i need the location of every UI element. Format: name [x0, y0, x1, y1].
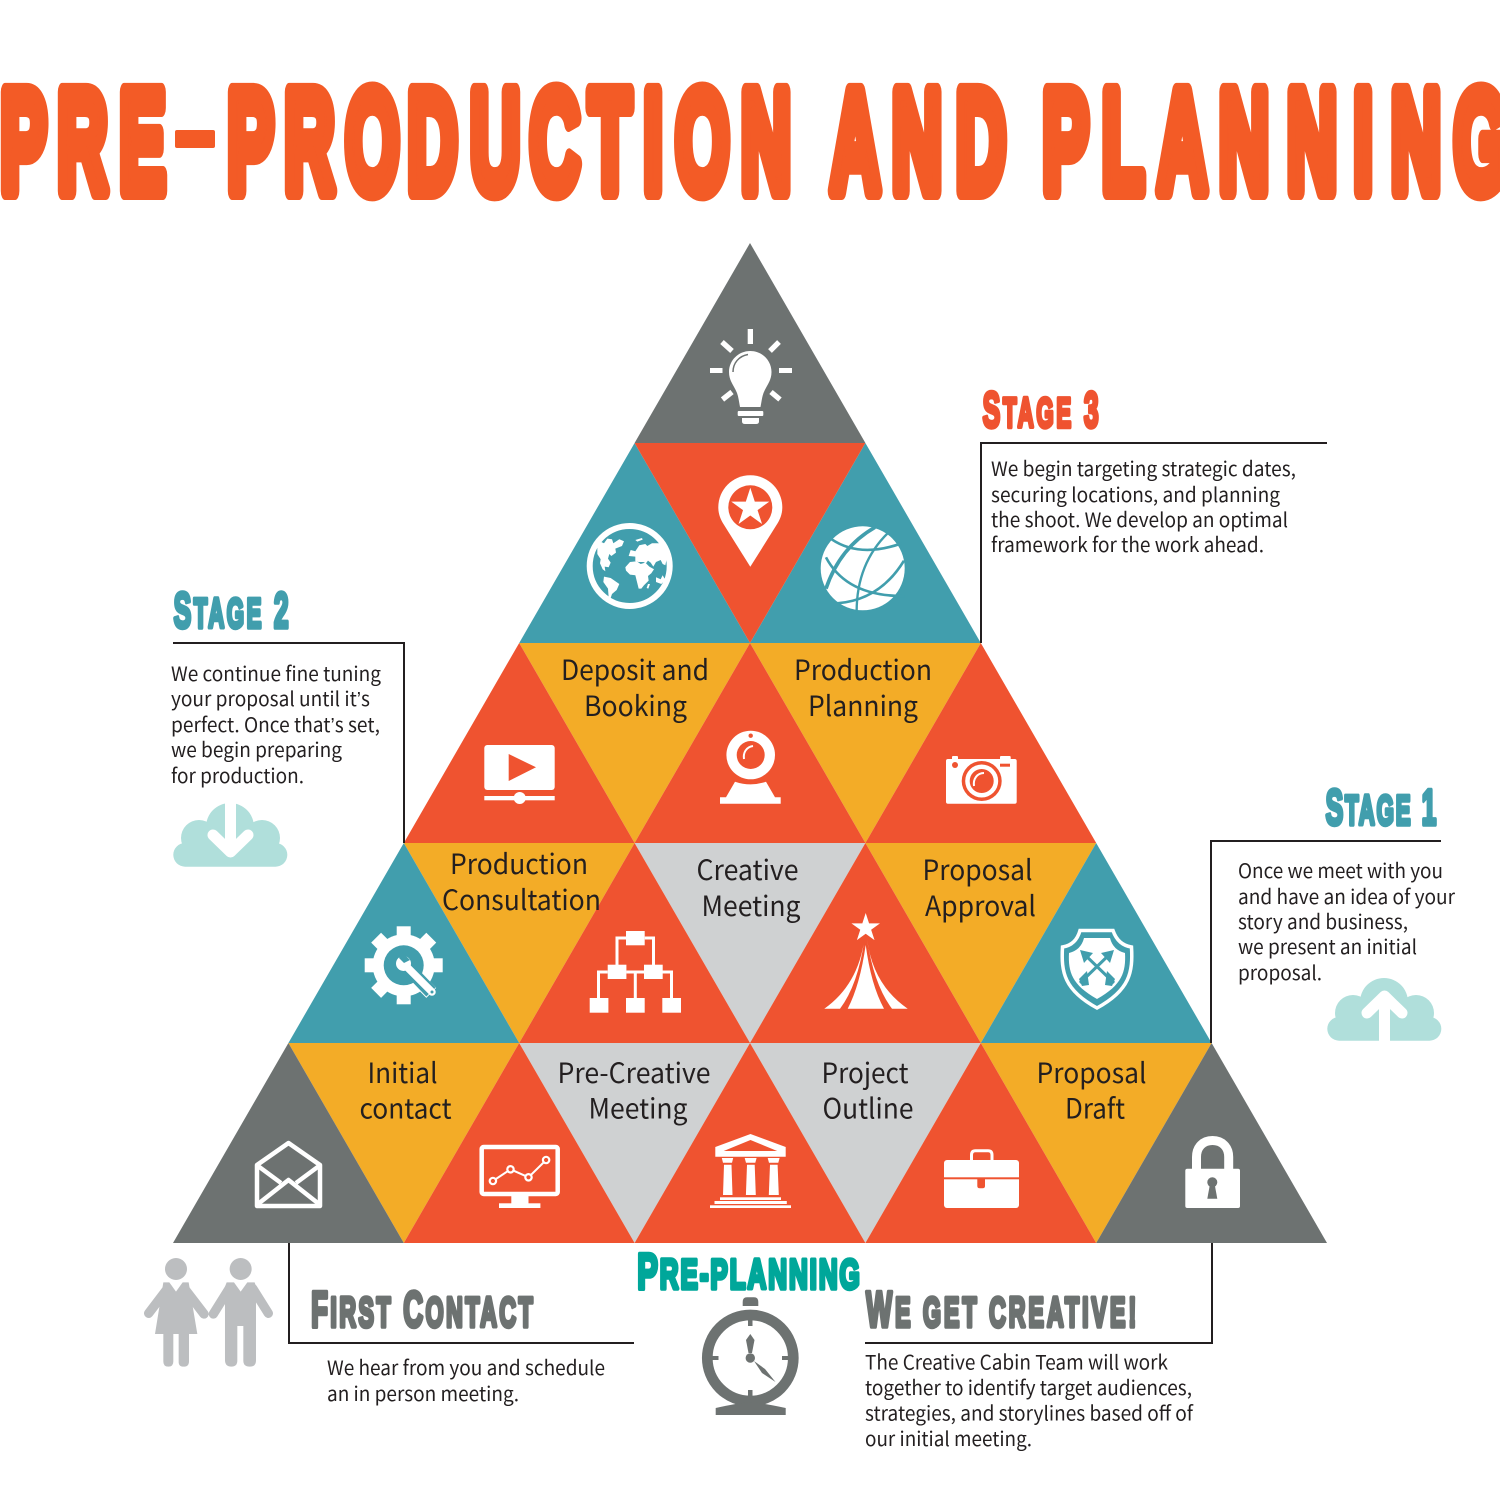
pyramid label: Deposit and Booking: Deposit and [561, 649, 709, 689]
text: stage 3 description: We begin targeting strategic dates, [991, 453, 1296, 482]
pyramid label: Initial contact: contact [360, 1088, 452, 1128]
icon: stopwatch clock [707, 1297, 793, 1415]
text: stage 1 description: proposal. [1238, 957, 1322, 986]
text: stage 3 description: securing locations, and planning [991, 479, 1280, 508]
text: stage 2 description: We continue fine tuning [171, 658, 381, 687]
pyramid label: Production Planning [794, 649, 932, 725]
title: PRE-PRODUCTION AND PLANNING [0, 61, 1500, 222]
pyramid label: Project Outline: Project [822, 1052, 909, 1092]
pyramid label: Production Planning: Planning [808, 685, 918, 725]
triangle row 5 [173, 1043, 1327, 1243]
text: stage 1 description: we present an initial [1238, 931, 1417, 960]
icon: org chart [590, 931, 681, 1013]
icon: video player [484, 745, 555, 804]
pyramid label: Initial contact [360, 1052, 452, 1128]
text: stage 2 description: we begin preparing [171, 734, 342, 763]
icon: gear and wrench [365, 926, 443, 1004]
pyramid label: Deposit and Booking [561, 649, 709, 725]
bracket: stage 3 [981, 443, 1327, 643]
text: stage 3 description: the shoot. We develop an optimal [991, 504, 1288, 533]
icon: cloud download [173, 803, 287, 867]
icon: open envelope [257, 1143, 320, 1206]
text: stage 3 description: framework for the work ahead. [991, 529, 1264, 558]
text: we get creative description: our initial meeting. [865, 1423, 1032, 1452]
text: stage 1 description: story and business, [1238, 906, 1408, 935]
pyramid label: Production Planning: Production [794, 649, 932, 689]
text: first contact description: We hear from you and schedule [327, 1352, 605, 1381]
heading: first contact: FIRST CONTACT [311, 1281, 533, 1338]
bracket: first contact [289, 1243, 634, 1343]
triangle row 4 [288, 843, 1212, 1043]
pyramid label: Proposal Draft: Proposal [1036, 1052, 1146, 1092]
triangle row 2 [519, 443, 981, 643]
text: stage 2 description [171, 658, 381, 789]
pyramid label: Creative Meeting: Creative [696, 849, 798, 889]
heading: pre-planning: PRE-PLANNING [637, 1243, 860, 1299]
pyramid label: Pre-Creative Meeting: Meeting [588, 1088, 688, 1128]
pyramid label: Project Outline: Outline [822, 1088, 914, 1128]
pyramid label: Proposal Draft [1036, 1052, 1146, 1128]
pyramid label: Production Consultation: Consultation [442, 879, 601, 919]
bracket: stage 1 [1211, 841, 1441, 1043]
pyramid label: Creative Meeting: Meeting [702, 885, 801, 925]
pyramid label: Production Consultation: Production [450, 843, 588, 883]
pyramid label: Project Outline [822, 1052, 914, 1128]
text: we get creative description: strategies, and storylines based off of [865, 1398, 1194, 1426]
icon: briefcase [944, 1151, 1019, 1208]
text: first contact description [327, 1352, 605, 1407]
icon: couple holding hands [149, 1258, 268, 1367]
pyramid label: Production Consultation [442, 843, 601, 919]
text: stage 2 description: perfect. Once that’s set, [171, 709, 380, 738]
pyramid label: Pre-Creative Meeting [558, 1052, 710, 1128]
icon: camera [946, 756, 1017, 804]
text: we get creative description: The Creative Cabin Team will work [865, 1346, 1168, 1376]
icon: location pin with star [718, 475, 782, 567]
text: we get creative description [865, 1346, 1194, 1452]
text: stage 2 description: for production. [171, 760, 304, 789]
icon: circus tent with star [824, 913, 908, 1009]
pyramid label: Proposal Approval: Approval [925, 885, 1036, 925]
text: stage 1 description: Once we meet with you [1238, 855, 1443, 884]
text: stage 1 description: and have an idea of your [1238, 881, 1455, 910]
bracket: we get creative [865, 1243, 1212, 1343]
text: stage 1 description [1238, 855, 1455, 986]
triangle row 1 [635, 243, 865, 443]
heading: stage 1: STAGE 1 [1326, 781, 1436, 836]
pyramid label: Deposit and Booking: Booking [584, 685, 687, 725]
icon: shield with crossed arrows [1062, 930, 1132, 1008]
text: stage 3 description [991, 453, 1296, 558]
text: first contact description: an in person meeting. [327, 1378, 519, 1407]
triangle row 3 [404, 643, 1096, 843]
text: we get creative description: together to identify target audiences, [865, 1372, 1192, 1401]
icon: monitor with line chart [482, 1147, 558, 1208]
pyramid label: Pre-Creative Meeting: Pre-Creative [558, 1052, 710, 1092]
pyramid label: Creative Meeting [696, 849, 801, 925]
icon: cloud upload [1327, 978, 1441, 1041]
heading: stage 3: STAGE 3 [983, 383, 1099, 438]
bracket: stage 2 [173, 643, 404, 843]
pyramid label: Proposal Approval [922, 849, 1036, 925]
icon: webcam [720, 731, 781, 804]
icon: wireframe globe [821, 526, 905, 612]
heading: stage 2: STAGE 2 [174, 584, 289, 639]
pyramid label: Proposal Draft: Draft [1065, 1088, 1125, 1128]
icon: classical building [710, 1134, 791, 1208]
pyramid label: Initial contact: Initial [368, 1052, 438, 1092]
icon: light bulb [710, 329, 792, 424]
heading: we get creative: WE GET CREATIVE! [866, 1281, 1136, 1338]
pyramid [173, 243, 1327, 1243]
text: stage 2 description: your proposal until it’s [171, 683, 370, 712]
pyramid label: Proposal Approval: Proposal [922, 849, 1032, 889]
icon: padlock [1185, 1140, 1240, 1208]
icon: world map globe [590, 526, 670, 606]
